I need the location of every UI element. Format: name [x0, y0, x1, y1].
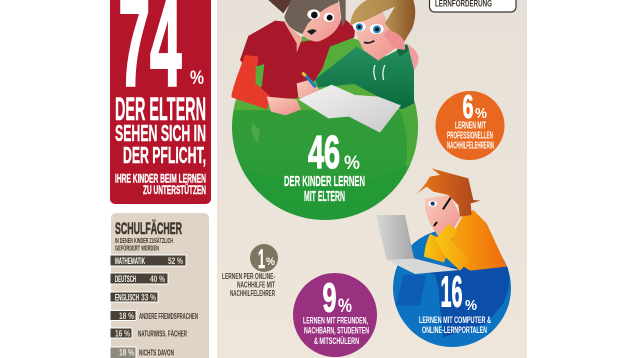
caption: ONLINE-LERNPORTALEN: [422, 325, 487, 336]
number: 46: [308, 126, 340, 178]
number: 6: [462, 88, 474, 125]
bar: Naturwiss. Fächer: NATURWISS. FÄCHER: [138, 330, 187, 338]
purple circle: 9 percent: [293, 273, 377, 357]
subheading: IN DENEN KINDER ZUSÄTZLICH: [115, 236, 173, 245]
caption: 1 percent: NACHHILFELEHRER: [230, 288, 275, 298]
panel: main background: [217, 0, 527, 358]
bar: Nichts davon: NICHTS DAVON: [139, 348, 174, 358]
illustration: mother and child learning: [231, 0, 418, 133]
orange circle: 6 percent: [436, 88, 504, 160]
infographic: [110, 0, 527, 358]
subheading: GEFÖRDERT WERDEN: [115, 244, 159, 252]
percent: %: [266, 256, 275, 268]
bar: Deutsch: DEUTSCH: [115, 274, 136, 284]
panel: 74 percent of parents: [110, 0, 211, 204]
mother: [231, 0, 355, 115]
boy: [297, 0, 418, 109]
bar: Englisch: ENGLISCH: [115, 292, 139, 302]
headline: DER PFLICHT,: [123, 142, 206, 168]
bar: Andere Fremdsprachen: ANDERE FREMDSPRACHEN: [139, 312, 198, 321]
illustration: child at laptop: [376, 168, 507, 274]
headline: IHRE KINDER BEIM LERNEN: [115, 174, 206, 186]
gray circle: 1 percent: 1: [258, 244, 265, 274]
caption: NACHBARN, STUDENTEN: [304, 326, 369, 336]
laptop: [376, 215, 459, 274]
headline: ZU UNTERSTÜTZEN: [143, 184, 206, 197]
headline: SEHEN SICH IN: [115, 120, 206, 146]
caption: [419, 315, 491, 336]
heading: SCHULFÄCHER: [115, 219, 182, 238]
panel: school subjects: [110, 213, 209, 358]
caption: LERNEN MIT COMPUTER &: [419, 315, 491, 326]
orange circle: 6 percent: PROFESSIONELLEN: [447, 130, 493, 142]
percent: %: [338, 296, 352, 317]
headline: [115, 91, 206, 197]
caption: LERNEN MIT FREUNDEN,: [303, 316, 368, 326]
caption: DER KINDER LERNEN: [284, 174, 365, 190]
bar: Mathematik: 52 %: [168, 256, 183, 267]
gray circle: 1 percent: [250, 244, 278, 274]
notebook: [298, 85, 401, 133]
bar: Mathematik: [110, 255, 186, 267]
green circle: 46 percent with parents: [232, 30, 420, 220]
child: [415, 168, 507, 271]
percent sign: %: [190, 68, 204, 89]
caption: 1 percent: [222, 271, 275, 298]
percent: %: [344, 153, 360, 174]
bar: Deutsch: [110, 273, 168, 285]
bar: Nichts davon: [110, 347, 174, 358]
orange circle: 6 percent: NACHHILFELEHRERIN: [447, 140, 494, 152]
caption: [447, 120, 494, 152]
caption: [284, 174, 365, 205]
bar: Andere Fremdsprachen: [110, 310, 198, 322]
caption: LERNEN MIT: [455, 120, 486, 132]
bar: Mathematik: MATHEMATIK: [115, 256, 145, 266]
caption: 1 percent: LERNEN PER ONLINE-: [222, 271, 275, 281]
caption: 1 percent: NACHHILFE MIT: [237, 280, 275, 290]
bar: Naturwiss. Fächer: [110, 328, 187, 340]
infographic: DER ELTERN: [115, 91, 206, 127]
percent: %: [475, 105, 487, 122]
caption: MIT ELTERN: [304, 189, 345, 205]
bar: Englisch: 33 %: [141, 292, 156, 304]
bar: Naturwiss. Fächer: 16 %: [115, 328, 130, 340]
caption: [303, 316, 369, 347]
bar: Deutsch: 40 %: [150, 274, 165, 285]
percent: %: [465, 297, 477, 314]
blue circle: 16 percent: [393, 229, 511, 347]
number: 9: [322, 274, 336, 320]
caption: & MITSCHÜLERN: [314, 336, 359, 347]
bar: Andere Fremdsprachen: 18 %: [119, 311, 134, 322]
subheading: [115, 236, 173, 252]
blue circle: 16 percent: 16: [440, 268, 462, 316]
